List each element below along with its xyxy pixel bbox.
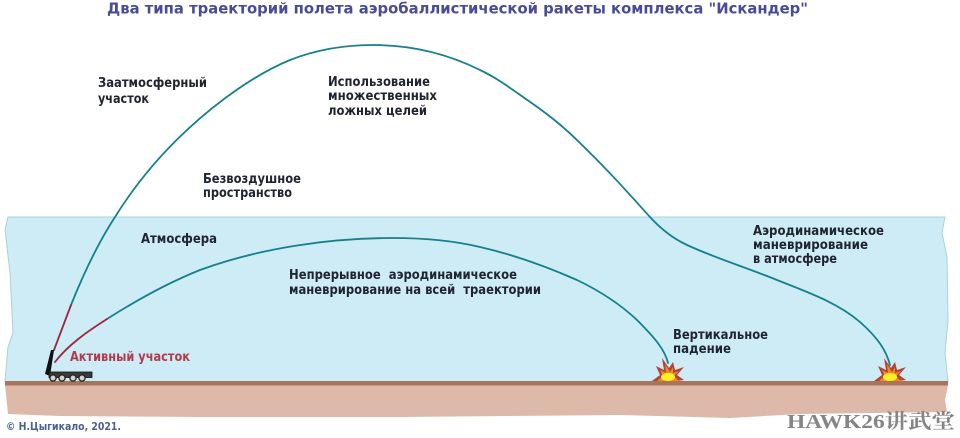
watermark: HAWK26讲武堂 (787, 410, 955, 433)
label: multiple decoys: Использование (328, 75, 430, 90)
label: continuous maneuvering: Непрерывное аэродинамическое (289, 268, 517, 283)
label: atmospheric maneuvering: маневрирование (753, 238, 868, 253)
label: continuous maneuvering: маневрирование на всей траектории (289, 283, 541, 298)
label: exo-atmospheric segment: участок (98, 92, 149, 107)
label: vertical descent (673, 328, 768, 357)
label: vacuum: пространство (203, 186, 292, 201)
label: multiple decoys: множественных (328, 89, 438, 104)
label: continuous maneuvering (289, 268, 541, 298)
label: exo-atmospheric segment (98, 76, 207, 107)
ground (5, 381, 948, 418)
label: vacuum (203, 172, 301, 201)
low trajectory (55, 238, 668, 363)
label: atmospheric maneuvering: Аэродинамическое (753, 224, 884, 239)
label: atmospheric maneuvering (753, 224, 884, 267)
label: boost phase: Активный участок (70, 350, 190, 365)
launcher vehicle (45, 350, 92, 381)
label: atmosphere: Атмосфера (141, 232, 217, 247)
label: exo-atmospheric segment: Заатмосферный (98, 76, 207, 91)
title: Два типа траекторий полета аэробаллистической ракеты комплекса "Искандер" (107, 0, 808, 18)
label: vertical descent: Вертикальное (673, 328, 768, 343)
label: vertical descent: падение (673, 342, 731, 357)
label: multiple decoys (328, 75, 438, 119)
copyright: © Н.Цыгикало, 2021. (6, 420, 121, 433)
label: atmospheric maneuvering: в атмосфере (753, 252, 837, 267)
explosion: far impact (874, 358, 906, 381)
atmosphere band (5, 217, 948, 382)
high trajectory (54, 45, 890, 365)
explosion: near impact (652, 358, 684, 381)
label: multiple decoys: ложных целей (328, 104, 427, 119)
label: vacuum: Безвоздушное (203, 172, 301, 187)
